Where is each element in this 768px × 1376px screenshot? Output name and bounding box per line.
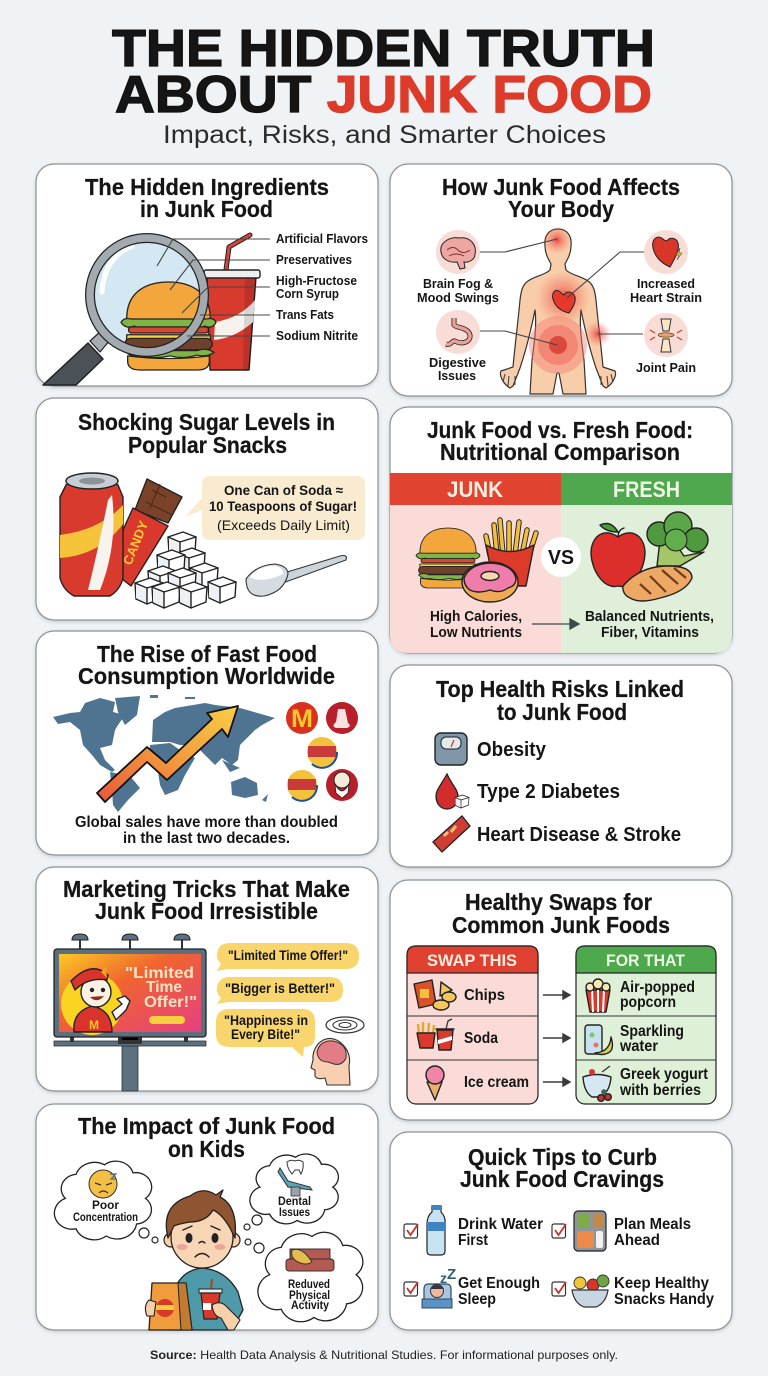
billboard slogan: Time bbox=[146, 979, 182, 996]
ingredient labels: High-Fructose bbox=[276, 274, 357, 288]
thought: reduced activity: Activity bbox=[291, 1300, 330, 1312]
body labels: Joint Pain bbox=[636, 360, 696, 375]
icon: grilled chicken bbox=[623, 566, 692, 601]
thought: poor concentration bbox=[54, 1161, 158, 1243]
heading: swaps: Healthy Swaps for bbox=[465, 889, 652, 915]
risk: heart disease bbox=[433, 816, 681, 852]
arrow bbox=[532, 619, 579, 629]
icon: stomach bbox=[436, 310, 480, 354]
panel: worldwide rise bbox=[36, 631, 378, 855]
junk column: JUNK bbox=[447, 477, 503, 502]
heading: swaps bbox=[452, 889, 670, 938]
icon: burger bbox=[416, 528, 480, 588]
arm glow bbox=[585, 321, 611, 347]
icon: magnifying glass bbox=[43, 238, 204, 385]
heading: worldwide rise bbox=[78, 641, 335, 689]
row: yogurt: with berries bbox=[619, 1082, 701, 1099]
row: sparkling water: Sparkling bbox=[620, 1023, 684, 1040]
thought: dental issues bbox=[244, 1154, 338, 1230]
tip: plan meals: Plan Meals bbox=[614, 1216, 691, 1233]
heading: comparison: Junk Food vs. Fresh Food: bbox=[427, 417, 693, 443]
billboard slogan: Offer!" bbox=[144, 994, 197, 1011]
icon: apple bbox=[591, 524, 645, 587]
icon: heart strain bbox=[644, 230, 688, 274]
callout: sugar fact: One Can of Soda ≈ bbox=[224, 482, 343, 498]
risk: obesity: Obesity bbox=[477, 739, 547, 761]
row: popcorn: Air-popped bbox=[620, 979, 695, 996]
swap arrows bbox=[543, 991, 570, 1086]
heading: marketing: Junk Food Irresistible bbox=[95, 898, 318, 924]
risk: heart disease: Heart Disease & Stroke bbox=[477, 824, 681, 846]
sales statement: in the last two decades. bbox=[123, 830, 290, 847]
mascot bbox=[71, 966, 130, 1032]
ingredient labels: Corn Syrup bbox=[276, 287, 339, 301]
logo: burger chain bottom bbox=[287, 770, 317, 801]
heading: sugar levels: Shocking Sugar Levels in bbox=[78, 409, 335, 435]
callout: sugar fact: (Exceeds Daily Limit) bbox=[217, 517, 350, 533]
heading: marketing: Marketing Tricks That Make bbox=[63, 876, 350, 902]
icon: soda can bbox=[60, 473, 123, 596]
heading: swaps: Common Junk Foods bbox=[452, 912, 670, 938]
icon: joint bbox=[644, 313, 688, 357]
heading: health risks: to Junk Food bbox=[497, 699, 627, 725]
junk label bbox=[430, 609, 522, 641]
tip: sleep: z bbox=[440, 1270, 447, 1286]
vs badge: VS bbox=[548, 547, 574, 569]
icon: candy bar bbox=[120, 479, 182, 586]
fresh label bbox=[585, 609, 714, 641]
heading: health risks: Top Health Risks Linked bbox=[436, 676, 684, 702]
fresh label: Balanced Nutrients, bbox=[585, 609, 714, 625]
icon: chest heart bbox=[553, 290, 575, 313]
logo: burger chain top bbox=[307, 737, 337, 768]
junk label: Low Nutrients bbox=[430, 625, 522, 641]
row: sparkling water: water bbox=[619, 1038, 658, 1055]
bubble: bigger is better bbox=[217, 977, 343, 1004]
thought: dental issues: Issues bbox=[279, 1207, 310, 1219]
tip: sleep: Z bbox=[447, 1266, 456, 1283]
heading: worldwide rise: The Rise of Fast Food bbox=[97, 641, 317, 667]
tip: healthy snacks bbox=[552, 1275, 714, 1308]
heading: body effects bbox=[442, 174, 680, 222]
swap this table: SWAP THIS bbox=[427, 951, 517, 970]
body labels: Heart Strain bbox=[630, 290, 702, 305]
thought: reduced activity: Physical bbox=[289, 1290, 330, 1302]
panel: body effects bbox=[390, 164, 732, 396]
billboard slogan bbox=[125, 965, 197, 1024]
heading: health risks bbox=[436, 676, 684, 725]
title: ABOUT JUNK FOOD bbox=[115, 66, 652, 124]
heading: hidden ingredients bbox=[85, 174, 329, 222]
body labels bbox=[417, 276, 702, 383]
thought: reduced activity bbox=[245, 1232, 363, 1322]
panel: quick tips bbox=[390, 1132, 732, 1330]
icon: sugar spoon bbox=[246, 556, 346, 596]
growth arrow bbox=[97, 706, 238, 802]
row: popcorn: popcorn bbox=[620, 994, 676, 1011]
sales statement: Global sales have more than doubled bbox=[75, 814, 338, 831]
icon: dental chair bbox=[278, 1160, 312, 1196]
logo: golden arches bbox=[286, 702, 318, 734]
risk: diabetes bbox=[436, 774, 620, 809]
ingredient labels bbox=[276, 232, 368, 343]
tip: healthy snacks: Keep Healthy bbox=[614, 1275, 709, 1292]
tip: plan meals bbox=[552, 1211, 691, 1251]
title bbox=[112, 20, 655, 124]
ingredient labels: Trans Fats bbox=[276, 308, 334, 322]
heading: tips: Quick Tips to Curb bbox=[468, 1144, 657, 1170]
icon: burger bbox=[121, 282, 216, 370]
body labels: Digestive bbox=[429, 355, 486, 370]
icon: broccoli bbox=[647, 512, 708, 566]
icon: soda cup bbox=[199, 1279, 240, 1330]
icon: sofa bbox=[286, 1249, 334, 1271]
row: chips: Chips bbox=[464, 987, 505, 1004]
thought: poor concentration: Poor bbox=[92, 1200, 120, 1212]
junk column bbox=[390, 473, 561, 653]
body labels: Increased bbox=[637, 276, 695, 291]
heading: kids bbox=[78, 1113, 335, 1162]
icon: brain bbox=[436, 230, 480, 274]
icon: fast food bag bbox=[145, 1283, 192, 1330]
heading: marketing bbox=[63, 876, 350, 924]
panel: fast food comparison bbox=[390, 407, 732, 653]
tip: sleep bbox=[404, 1266, 540, 1308]
panel: health risks bbox=[390, 665, 732, 867]
junk label: High Calories, bbox=[430, 609, 522, 625]
heading: comparison: Nutritional Comparison bbox=[440, 439, 680, 465]
body labels: Mood Swings bbox=[417, 290, 499, 305]
ingredient labels: Preservatives bbox=[276, 253, 352, 267]
tip: plan meals: Ahead bbox=[614, 1232, 660, 1249]
logo: colonel bbox=[326, 769, 358, 801]
tip: healthy snacks: Snacks Handy bbox=[614, 1291, 714, 1308]
connector lines bbox=[480, 239, 644, 345]
fresh column bbox=[561, 473, 732, 653]
heading: hidden ingredients: in Junk Food bbox=[140, 196, 273, 222]
heading: kids: The Impact of Junk Food bbox=[78, 1113, 335, 1139]
for that table: FOR THAT bbox=[606, 951, 686, 970]
panel: healthy swaps bbox=[390, 880, 732, 1120]
row: popcorn bbox=[586, 979, 695, 1012]
bubble: happiness bbox=[216, 1009, 315, 1057]
fresh column: FRESH bbox=[613, 477, 680, 502]
body labels: Issues bbox=[438, 368, 476, 383]
row: yogurt: Greek yogurt bbox=[620, 1066, 709, 1083]
callout: sugar fact: 10 Teaspoons of Sugar! bbox=[209, 498, 357, 514]
tip: drink water bbox=[404, 1206, 543, 1255]
thought: poor concentration: Concentration bbox=[73, 1212, 138, 1224]
for that table bbox=[576, 946, 716, 1104]
body labels: Brain Fog & bbox=[423, 276, 493, 291]
billboard bbox=[54, 934, 206, 1091]
chest glow bbox=[536, 271, 590, 325]
heading: worldwide rise: Consumption Worldwide bbox=[78, 663, 335, 689]
row: chips bbox=[414, 980, 505, 1010]
icon: magnifier lens bbox=[91, 239, 203, 351]
bubble: bigger is better: "Bigger is Better!" bbox=[225, 981, 335, 996]
abdomen glow bbox=[529, 316, 587, 374]
title: THE HIDDEN TRUTH bbox=[112, 20, 655, 78]
heading: kids: on Kids bbox=[168, 1136, 245, 1162]
body figure bbox=[500, 226, 616, 394]
icon: dizzy brain head bbox=[311, 1017, 364, 1085]
panel: hidden ingredients bbox=[36, 164, 378, 386]
heading: comparison bbox=[427, 417, 693, 465]
risk: obesity bbox=[435, 733, 547, 765]
thought: dental issues: Dental bbox=[278, 1196, 311, 1208]
ingredient labels: Sodium Nitrite bbox=[276, 329, 358, 343]
panel: impact on kids bbox=[36, 1104, 378, 1330]
risk: diabetes: Type 2 Diabetes bbox=[477, 781, 620, 803]
heading: body effects: Your Body bbox=[508, 196, 614, 222]
heading: sugar levels bbox=[78, 409, 335, 458]
heading: tips bbox=[460, 1144, 664, 1192]
bubble: happiness: Every Bite!" bbox=[231, 1027, 300, 1042]
icon: sugar cubes bbox=[135, 532, 236, 608]
callout: sugar fact bbox=[185, 476, 365, 540]
billboard slogan: "Limited bbox=[125, 965, 194, 982]
source footer: Source: Health Data Analysis & Nutritional Studies. For informational purposes only. bbox=[150, 1348, 618, 1362]
tip: drink water: First bbox=[458, 1232, 489, 1249]
heading: tips: Junk Food Cravings bbox=[460, 1166, 664, 1192]
vs badge bbox=[541, 537, 581, 577]
fresh label: Fiber, Vitamins bbox=[601, 625, 699, 641]
row: yogurt bbox=[583, 1066, 709, 1101]
row: soda: Soda bbox=[464, 1030, 498, 1047]
icon: donut bbox=[462, 562, 518, 602]
panel: sugar levels bbox=[36, 398, 378, 620]
row: ice cream bbox=[426, 1066, 529, 1100]
bubble: limited time: "Limited Time Offer!" bbox=[228, 948, 348, 963]
row: sparkling water bbox=[585, 1023, 684, 1055]
panel: marketing tricks bbox=[36, 867, 378, 1091]
bubble: limited time bbox=[217, 943, 359, 971]
callout lines bbox=[157, 239, 270, 336]
thought: reduced activity: Reduved bbox=[288, 1279, 330, 1291]
icon: sleepy face bbox=[89, 1170, 117, 1198]
mascot: M bbox=[89, 1018, 99, 1032]
icon: candy bar: CANDY bbox=[120, 518, 151, 567]
swap this table bbox=[407, 946, 538, 1104]
heading: sugar levels: Popular Snacks bbox=[128, 432, 287, 458]
logo: golden arches: M bbox=[291, 705, 313, 733]
world map bbox=[53, 695, 275, 812]
row: soda bbox=[417, 1019, 498, 1050]
sales statement bbox=[75, 814, 338, 847]
tip: drink water: Drink Water bbox=[458, 1216, 543, 1233]
kid illustration bbox=[145, 1190, 243, 1330]
icon: soda cup bbox=[204, 235, 260, 370]
logo: bell bbox=[326, 702, 358, 734]
tip: sleep: Get Enough bbox=[458, 1275, 540, 1292]
row: ice cream: Ice cream bbox=[464, 1074, 529, 1091]
icon: fries bbox=[486, 520, 536, 586]
subtitle: Impact, Risks, and Smarter Choices bbox=[163, 121, 606, 149]
heading: hidden ingredients: The Hidden Ingredients bbox=[85, 174, 329, 200]
ingredient labels: Artificial Flavors bbox=[276, 232, 368, 246]
bubble: happiness: "Happiness in bbox=[224, 1013, 308, 1028]
head glow bbox=[543, 226, 571, 254]
heading: body effects: How Junk Food Affects bbox=[442, 174, 680, 200]
tip: sleep: Sleep bbox=[458, 1291, 496, 1308]
